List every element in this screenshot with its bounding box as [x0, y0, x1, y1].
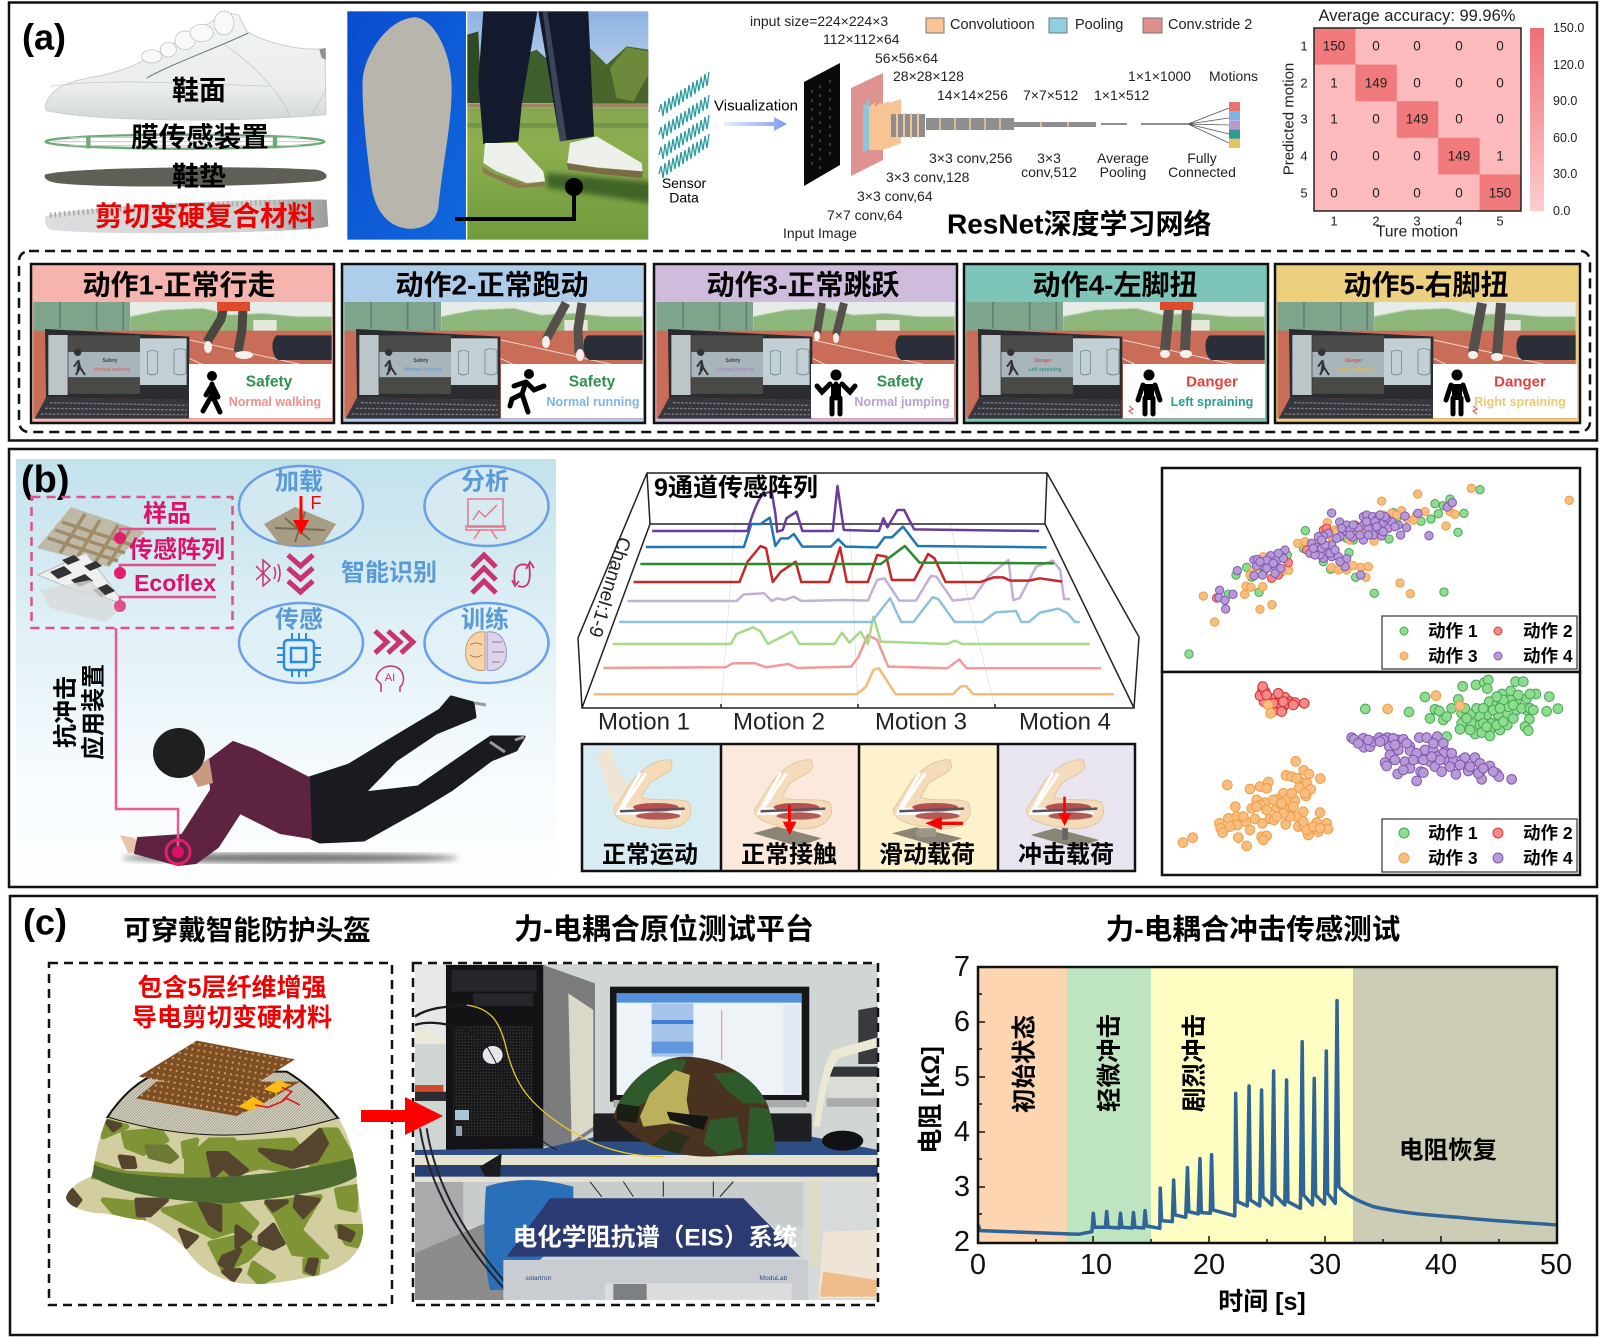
chart: confusion matrix: 120.0 [1553, 58, 1584, 72]
card: motion 4 [964, 264, 1268, 423]
axis numbers: 10 [1080, 1249, 1112, 1281]
icon: AI head: AI [385, 672, 395, 684]
panel c: smart helmet [10, 896, 1597, 1335]
band label: severe impact: 剧烈冲击 [1180, 1014, 1208, 1112]
axis label: time: 时间 [s] [1218, 1288, 1306, 1316]
network labels: Fully [1187, 150, 1217, 166]
chart: confusion matrix: 4 [1455, 214, 1463, 228]
oval: training [424, 603, 548, 683]
oval: sensing [239, 603, 363, 683]
network labels: 3×3 conv,256 [929, 150, 1013, 166]
chart: confusion matrix: 1 [1330, 112, 1338, 126]
legend: raw scatter: 动作 1 [1428, 621, 1478, 641]
photo: test platform [415, 964, 878, 1300]
chart: confusion matrix: 0 [1496, 76, 1504, 90]
chart: confusion matrix: Predicted motion [1280, 63, 1298, 175]
chart: confusion matrix: 0 [1372, 148, 1380, 164]
text: EIS system: 电化学阻抗谱（EIS）系统 [513, 1224, 797, 1252]
network labels: 7×7 conv,64 [827, 207, 903, 223]
chart: clustered scatter [1162, 672, 1580, 875]
card: motion 2: Normal running [546, 395, 640, 409]
axis numbers: 40 [1425, 1249, 1457, 1281]
chart: confusion matrix: 0 [1455, 38, 1463, 54]
chart: confusion matrix: 149 [1448, 148, 1470, 164]
axis numbers [954, 951, 1572, 1281]
legend: network layers: Pooling [1075, 17, 1123, 33]
chart: raw scatter [1162, 468, 1580, 672]
chart: confusion matrix: 0 [1413, 38, 1421, 54]
card: motion 1 [31, 264, 334, 423]
chart: confusion matrix: 0.0 [1553, 204, 1570, 218]
panels: four arm loading states: 冲击载荷 [1018, 842, 1114, 868]
card: motion 3: Normal jumping [716, 367, 754, 373]
network labels: 3×3 conv,64 [857, 188, 933, 204]
chart: confusion matrix: 0 [1455, 76, 1463, 90]
card: motion 1: Safety [102, 358, 118, 364]
label: shoe upper: 鞋面 [172, 76, 226, 106]
network labels: 112×112×64 [823, 31, 900, 47]
chart: confusion matrix: 1 [1496, 148, 1504, 164]
chart: confusion matrix: Average accuracy: 99.96% [1319, 7, 1516, 25]
network diagram [804, 63, 1240, 186]
network labels: 1×1×512 [1094, 87, 1149, 103]
band label: recovery: 电阻恢复 [1399, 1136, 1497, 1164]
text: modulab logo: ModuLab [759, 1275, 787, 1282]
card: motion 2: Safety [413, 358, 429, 364]
oval: analysis: 分析 [461, 468, 509, 496]
text: sensor data: Sensor [662, 175, 707, 191]
legend: clustered scatter: 动作 2 [1523, 823, 1573, 843]
panel a: smart shoe [9, 2, 1597, 440]
axis numbers: 3 [954, 1171, 970, 1203]
chart: confusion matrix: 2 [1372, 214, 1380, 228]
axis numbers: 5 [954, 1061, 970, 1093]
card: motion 4: Danger [1034, 358, 1052, 364]
network labels: Input Image [783, 225, 857, 241]
dashed box: platform [413, 963, 878, 1305]
dashed callout: sample layers: 样品 [143, 500, 191, 528]
chart: confusion matrix: 0 [1455, 186, 1463, 200]
chart: confusion matrix: 150 [1489, 186, 1511, 200]
axis labels: motions [598, 708, 1111, 736]
axis numbers: 7 [954, 951, 970, 983]
arrow: up chevrons [472, 555, 496, 593]
label: film sensor: 膜传感装置 [131, 122, 269, 152]
chart: confusion matrix: 3 [1300, 112, 1308, 126]
chart: confusion matrix: 1 [1330, 76, 1338, 90]
network labels: Connected [1168, 164, 1236, 180]
legend: clustered scatter: 动作 4 [1523, 848, 1573, 868]
chart: confusion matrix: 0 [1372, 112, 1380, 126]
icon: sensor data waves [659, 72, 709, 206]
icon: exploded shoe layers [45, 11, 328, 233]
heading: smart recognition: 智能识别 [341, 560, 437, 586]
network labels: 56×56×64 [875, 50, 938, 66]
network labels [750, 13, 1258, 241]
network labels: 3×3 [1037, 150, 1061, 166]
panels: four arm loading states: 滑动载荷 [879, 842, 975, 868]
chart: confusion matrix: 2 [1300, 76, 1308, 90]
card: motion 4: Left spraining [1171, 395, 1253, 409]
title: 9 channels: 9通道传感阵列 [654, 473, 818, 502]
icon: AI head [376, 666, 403, 692]
chart: confusion matrix: 90.0 [1553, 94, 1577, 108]
oval: training: 训练 [461, 606, 509, 634]
chart: confusion matrix: 5 [1300, 186, 1308, 200]
card: motion 5: Danger [1345, 358, 1363, 364]
dashed box: helmet [49, 963, 392, 1305]
panel b: impact recognition [9, 449, 1597, 887]
axis numbers: 30 [1309, 1249, 1341, 1281]
chart: 9-channel waterfall [578, 473, 1139, 736]
heading: test platform: 力-电耦合原位测试平台 [514, 912, 814, 946]
icon: helmet [66, 1040, 364, 1284]
card: motion 3: 动作3-正常跳跃 [707, 270, 899, 300]
card: motion 2 [342, 264, 645, 423]
legend: clustered scatter: 动作 1 [1428, 823, 1478, 843]
chart: confusion matrix [1280, 7, 1584, 240]
card: motion 4: Left spraining [1028, 367, 1062, 373]
chart: confusion matrix: 0 [1413, 186, 1421, 200]
photo: person wearing shoes on grass [467, 11, 660, 240]
chart: confusion matrix: 0 [1330, 186, 1338, 200]
callout line from shoe to insole [455, 178, 583, 219]
text: five layers [132, 974, 332, 1032]
dashed callout: sample layers [32, 497, 232, 628]
chart: confusion matrix: 0 [1413, 76, 1421, 90]
vertical label: impact gear: 抗冲击 [52, 676, 80, 748]
card: motion 1: Normal walking [229, 395, 321, 409]
axis labels: motions: Motion 1 [598, 708, 690, 736]
label: composite: 剪切变硬复合材料 [95, 200, 315, 232]
band label: light impact: 轻微冲击 [1096, 1014, 1124, 1112]
network labels: conv,512 [1021, 164, 1077, 180]
card: motion 2: Normal running [404, 367, 442, 373]
chart: confusion matrix: 30.0 [1553, 167, 1577, 181]
text: five layers: 包含5层纤维增强 [138, 974, 326, 1002]
axis numbers: 20 [1193, 1249, 1225, 1281]
card: motion 5: Right spraining [1474, 395, 1566, 409]
legend: raw scatter: 动作 4 [1523, 646, 1573, 666]
vertical label: impact gear: 应用装置 [80, 664, 108, 760]
heading: impact test: 力-电耦合冲击传感测试 [1106, 914, 1400, 946]
panel label (a): (a) [22, 16, 66, 58]
chart: confusion matrix: Ture motion [1376, 224, 1458, 240]
legend: network layers [926, 17, 1252, 33]
icon: bluetooth [256, 560, 280, 586]
text: solartron logo: solartron [525, 1275, 552, 1282]
legend: raw scatter [1382, 616, 1577, 669]
label: insole: 鞋垫 [172, 162, 226, 192]
chart: confusion matrix: 5 [1496, 214, 1504, 228]
axis numbers: 4 [954, 1116, 970, 1148]
text: five layers: 导电剪切变硬材料 [132, 1004, 332, 1032]
axis labels: motions: Motion 4 [1019, 708, 1111, 736]
oval: loading [239, 466, 363, 546]
chart: confusion matrix: 0 [1372, 38, 1380, 54]
card: motion 1: 动作1-正常行走 [83, 270, 275, 300]
chart: confusion matrix: 150 [1323, 38, 1345, 54]
arrow: visualization [724, 117, 787, 131]
axis labels: motions: Motion 2 [733, 708, 825, 736]
arrow: right chevrons [375, 631, 413, 653]
chart: resistance vs time [917, 951, 1572, 1316]
chart: confusion matrix: 0 [1496, 112, 1504, 126]
chart: confusion matrix: 0 [1372, 186, 1380, 200]
network labels: Average [1097, 150, 1149, 166]
axis numbers: 6 [954, 1006, 970, 1038]
card: motion 3: Safety [877, 374, 924, 390]
card: motion 3: Safety [725, 358, 741, 364]
axis numbers: 0 [970, 1249, 986, 1281]
subpanel background: workflow [16, 459, 556, 876]
card: motion 1: Normal walking [94, 367, 130, 373]
figure: person falling [120, 697, 524, 865]
chart: confusion matrix: 149 [1406, 112, 1428, 126]
card: motion 4: 动作4-左脚扭 [1033, 270, 1197, 300]
network labels: input size=224×224×3 [750, 13, 888, 29]
text: visualization: Visualization [714, 98, 798, 114]
network labels: 7×7×512 [1023, 87, 1078, 103]
panels: four arm loading states [582, 744, 1135, 871]
icon: refresh loop [512, 562, 534, 587]
connector: device to elbow [116, 628, 190, 864]
card: motion 4: Danger [1186, 374, 1238, 390]
dashed callout: sample layers: 传感阵列 [129, 536, 225, 564]
legend: clustered scatter: 动作 3 [1428, 848, 1478, 868]
axis label: channel: Channel:1-9 [584, 534, 634, 640]
network labels: 1×1×1000 [1128, 68, 1191, 84]
panels: four arm loading states: 正常运动 [602, 842, 698, 868]
card: motion 3: Normal jumping [854, 395, 950, 409]
chart: confusion matrix: 1 [1330, 214, 1338, 228]
arrow: down chevrons [288, 555, 313, 592]
chart: confusion matrix: 1 [1300, 38, 1308, 54]
oval: analysis [424, 466, 548, 546]
band label: initial state: 初始状态 [1010, 1015, 1038, 1113]
arrow: helmet to platform [361, 1097, 443, 1135]
legend: network layers: Convolutioon [950, 17, 1035, 33]
axis numbers: 50 [1540, 1249, 1572, 1281]
dashed group box: motions [19, 251, 1590, 432]
network labels: 28×28×128 [893, 68, 964, 84]
panels: four arm loading states: 正常接触 [741, 842, 837, 868]
card: motion 1: Safety [246, 374, 293, 390]
text: sensor data: Data [669, 190, 699, 206]
oval: loading: 加载 [275, 468, 323, 496]
oval: loading: F [310, 493, 322, 513]
card: motion 5: Right spraining [1338, 367, 1374, 373]
legend: clustered scatter [1382, 819, 1577, 872]
card: motion 5 [1275, 264, 1580, 423]
network labels: 14×14×256 [937, 87, 1008, 103]
card: motion 2: Safety [569, 374, 616, 390]
network labels: Motions [1209, 68, 1258, 84]
heading: ResNet: ResNet深度学习网络 [947, 208, 1211, 240]
card: motion 2: 动作2-正常跑动 [396, 270, 588, 300]
panel label (b): (b) [21, 459, 70, 501]
chart: confusion matrix: 4 [1300, 148, 1308, 164]
chart: confusion matrix: 3 [1413, 214, 1421, 228]
legend: network layers: Conv.stride 2 [1168, 17, 1252, 33]
legend: raw scatter: 动作 3 [1428, 646, 1478, 666]
chart: confusion matrix: 150.0 [1553, 21, 1584, 35]
chart: confusion matrix: 149 [1365, 76, 1387, 90]
heading: helmet: 可穿戴智能防护头盔 [123, 914, 371, 946]
photo: insole on blue [347, 11, 466, 240]
chart: confusion matrix: 0 [1496, 38, 1504, 54]
chart: confusion matrix: 60.0 [1553, 131, 1577, 145]
chart: confusion matrix: 0 [1455, 112, 1463, 126]
chart: confusion matrix: 0 [1413, 148, 1421, 164]
card: motion 5: Danger [1494, 374, 1546, 390]
axis labels: motions: Motion 3 [875, 708, 967, 736]
network labels: Pooling [1100, 164, 1146, 180]
panel label (c): (c) [23, 902, 67, 942]
vertical label: impact gear [52, 664, 108, 760]
chart: confusion matrix: 0 [1330, 148, 1338, 164]
network labels: 3×3 conv,128 [886, 169, 970, 185]
axis numbers: 2 [954, 1226, 970, 1258]
dashed callout: sample layers: Ecoflex [134, 570, 216, 596]
card: motion 5: 动作5-右脚扭 [1344, 270, 1508, 300]
oval: sensing: 传感 [275, 606, 323, 634]
legend: raw scatter: 动作 2 [1523, 621, 1573, 641]
axis label: resistance: 电阻 [kΩ] [917, 1046, 945, 1154]
card: motion 3 [654, 264, 957, 423]
